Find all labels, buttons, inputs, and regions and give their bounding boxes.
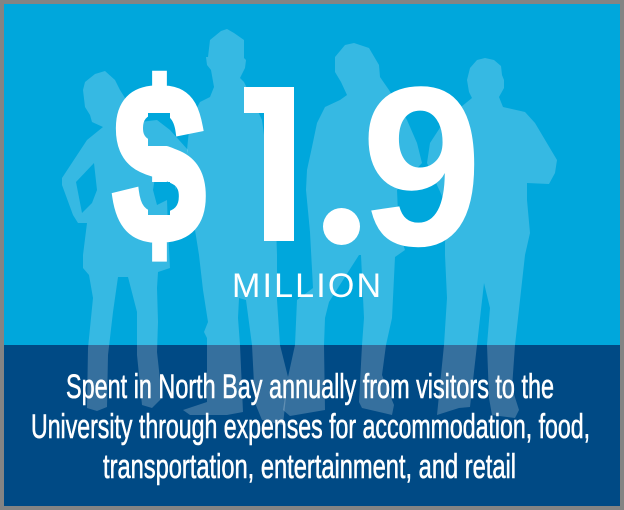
- silhouette: man on the right: [427, 58, 557, 418]
- silhouette: woman: [62, 71, 188, 411]
- digit 9: 9: [361, 40, 482, 294]
- label: MILLION: MILLION: [232, 267, 381, 305]
- panel: blue upper background: [4, 4, 620, 345]
- description text: [31, 368, 590, 486]
- dollar sign: $: [113, 39, 205, 289]
- panel: navy lower band: [4, 345, 620, 506]
- silhouette: man in the middle: [283, 43, 422, 416]
- digit 1: 1: [175, 34, 374, 290]
- silhouettes: group of four people: [62, 29, 557, 425]
- silhouette: tall man: [183, 29, 288, 425]
- big figure: $1.9: [112, 70, 474, 262]
